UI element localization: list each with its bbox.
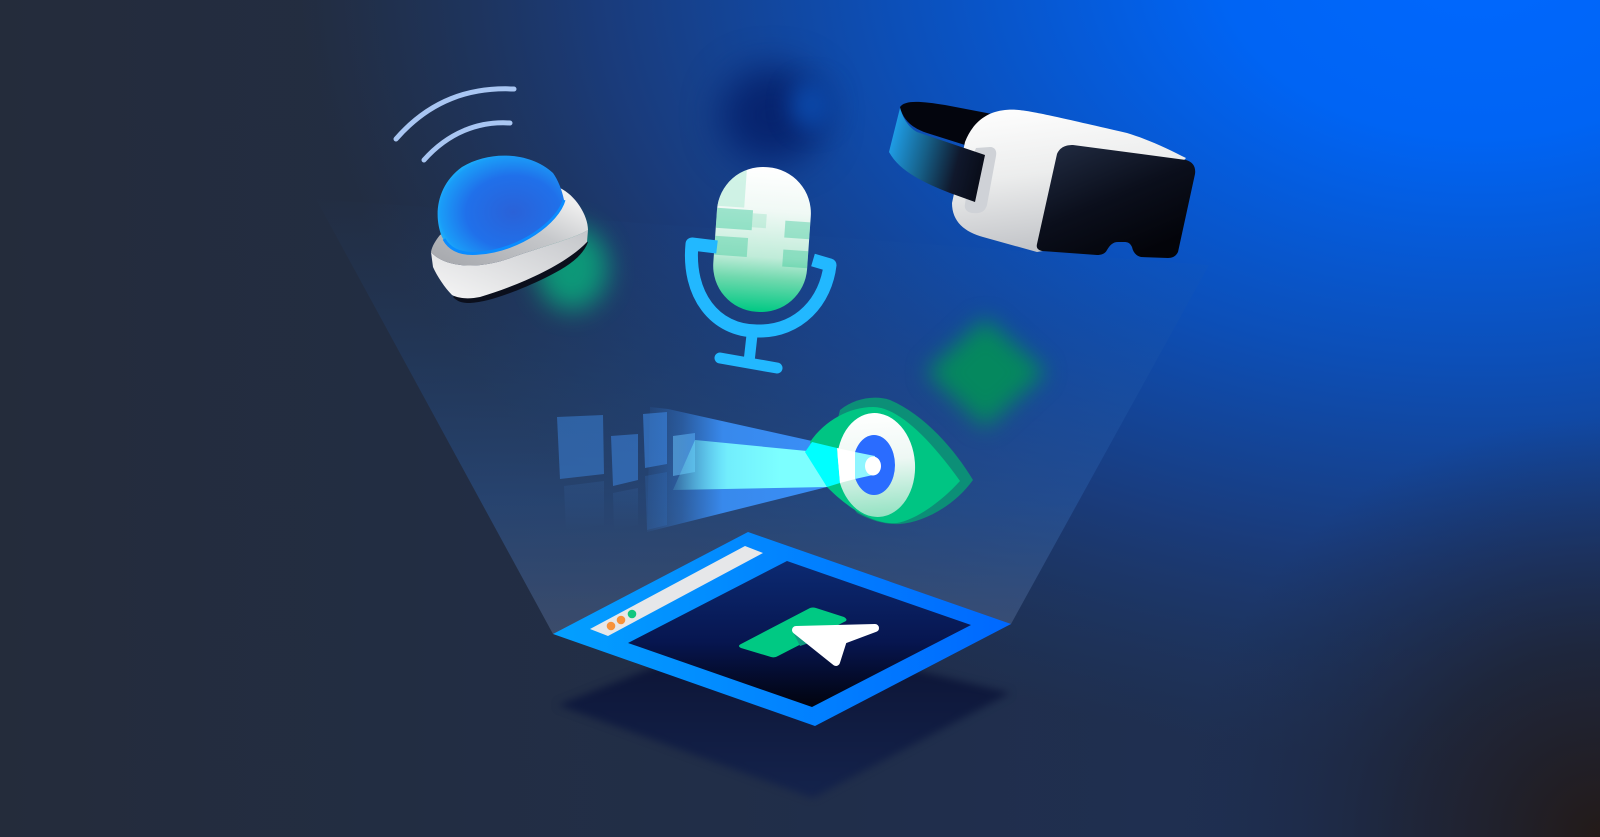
- eye back lid: [825, 398, 973, 524]
- button dome rim: [444, 200, 564, 253]
- sound waves: [396, 89, 514, 160]
- button base side: [431, 230, 588, 298]
- gaze beam inner: [673, 440, 827, 490]
- headset visor: [1037, 145, 1195, 258]
- address bar: [590, 546, 763, 636]
- window screen: [628, 561, 971, 707]
- content panels: [557, 412, 695, 530]
- window frame: [553, 532, 1011, 726]
- window dots: [607, 610, 636, 630]
- eye sclera: [810, 407, 960, 523]
- beam over sclera: [805, 442, 840, 487]
- headset buckle: [965, 147, 996, 213]
- gaze beam outer: [647, 407, 827, 532]
- illustration canvas: [336, 0, 1600, 837]
- icon: VR headset: [889, 102, 1195, 258]
- button dome: [438, 156, 564, 253]
- button base top: [431, 188, 588, 266]
- eye iris ring: [833, 410, 919, 520]
- headset strap front: [889, 108, 985, 202]
- beam over iris: [837, 448, 855, 483]
- projection light cone: [316, 199, 1209, 634]
- eye highlight: [865, 456, 881, 476]
- button green glow: [536, 226, 608, 310]
- eye pupil: [853, 435, 895, 495]
- headset strap back: [900, 102, 992, 145]
- cursor arrow: [796, 628, 875, 662]
- headset body: [952, 110, 1186, 252]
- mic stand: [720, 335, 777, 368]
- mic capsule: [710, 164, 814, 315]
- mic capsule stripes: [713, 164, 814, 268]
- beam over pupil: [855, 452, 875, 479]
- card shadow: [792, 630, 815, 646]
- blurred green glow: [926, 318, 1046, 428]
- blurred dark blue glow: [720, 67, 834, 163]
- window shadow: [558, 630, 1010, 798]
- green card: [739, 608, 846, 657]
- icon: smart button: [396, 89, 608, 310]
- mic cup: [691, 244, 830, 331]
- browser window: [553, 532, 1011, 726]
- icon: microphone: [691, 164, 830, 368]
- button shadow edge: [453, 240, 588, 303]
- icon: gaze eye with beam: [557, 398, 973, 532]
